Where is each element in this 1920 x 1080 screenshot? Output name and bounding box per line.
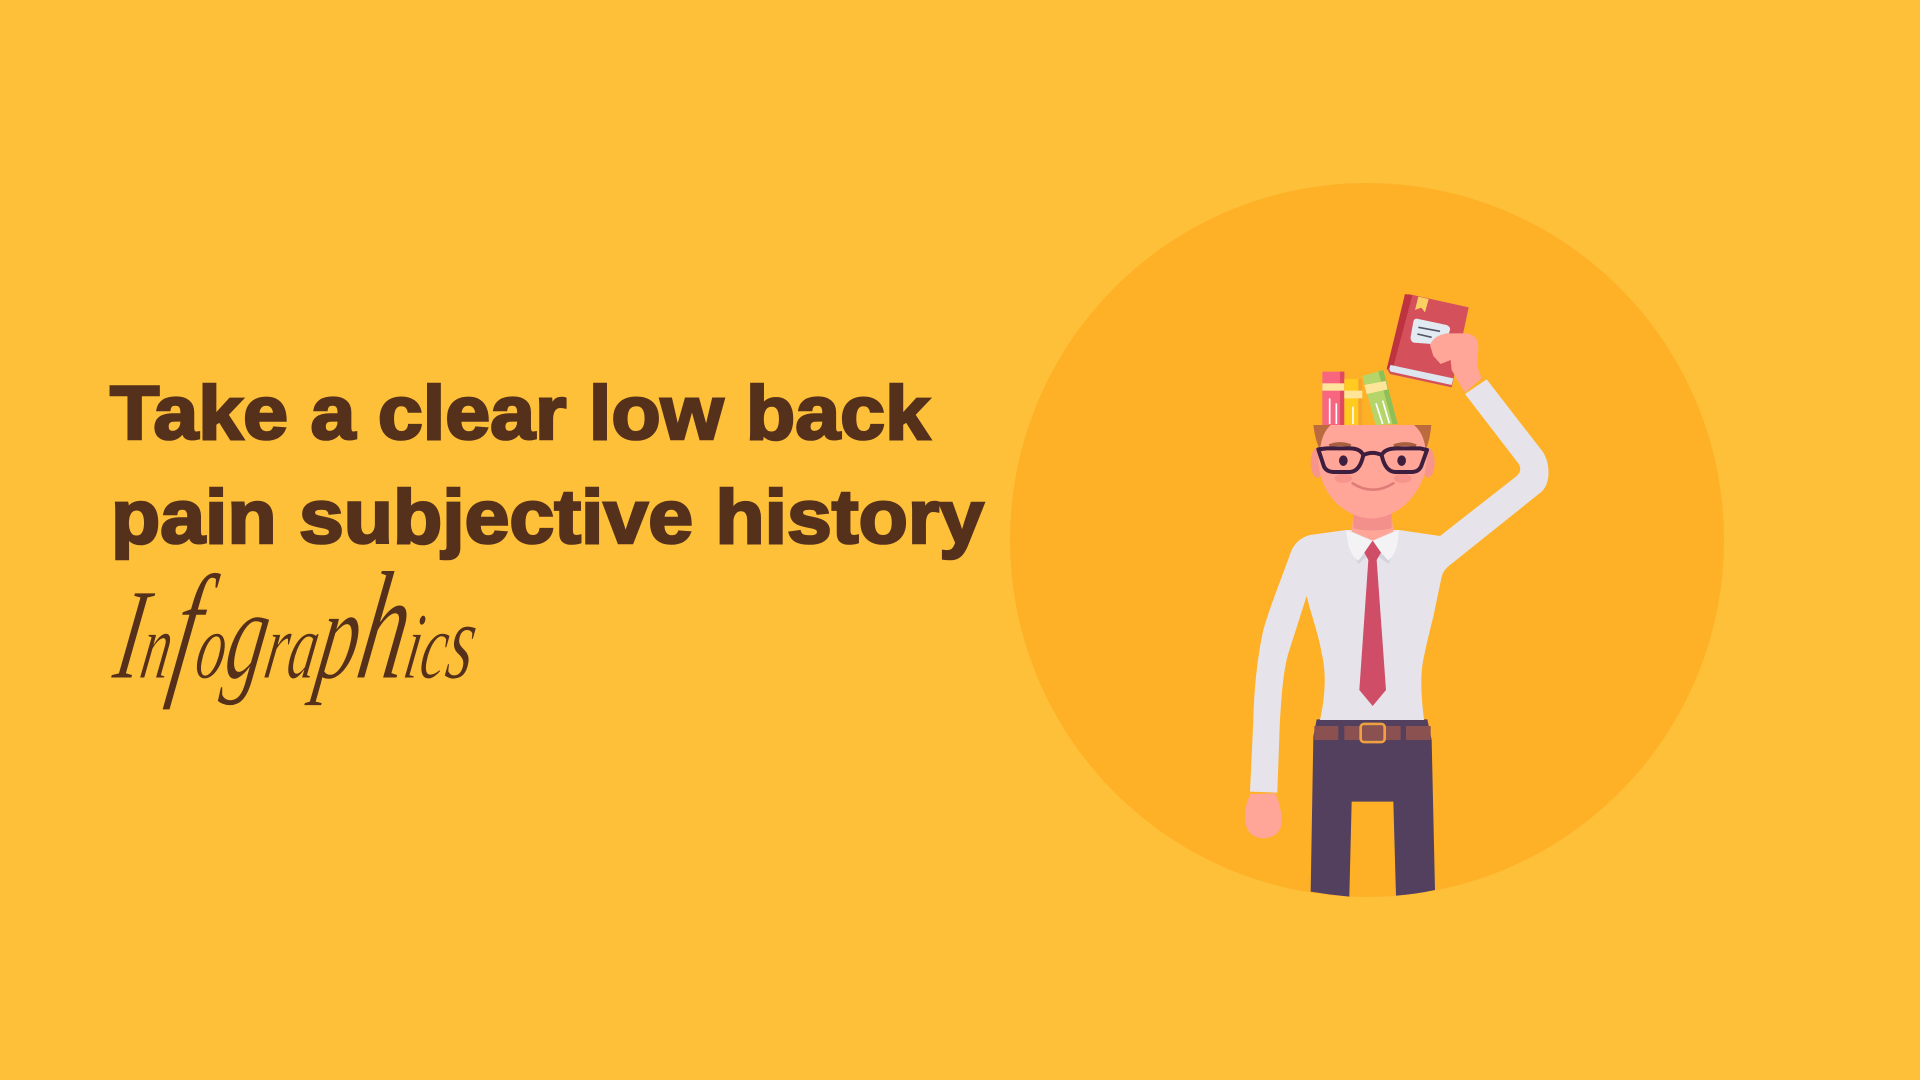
hair (1313, 425, 1431, 450)
neck (1352, 515, 1393, 541)
yellow book (1344, 379, 1362, 426)
trousers (1311, 719, 1435, 897)
book spine (1387, 294, 1412, 369)
belt buckle (1361, 724, 1385, 742)
ears (1311, 448, 1435, 478)
background circle (1010, 183, 1724, 897)
belt (1314, 726, 1431, 740)
shirt collar (1346, 530, 1399, 564)
cheeks (1335, 474, 1411, 483)
necktie (1359, 541, 1386, 706)
left fist (1245, 793, 1282, 838)
raised hand (1430, 333, 1482, 393)
upper body (1311, 294, 1482, 530)
bookmark (1415, 297, 1429, 312)
books in head (1322, 370, 1398, 426)
green book (1362, 370, 1398, 425)
illustration: man with books in head (1245, 294, 1549, 897)
glasses (1318, 448, 1427, 472)
book cover (1387, 294, 1469, 387)
face (1318, 425, 1427, 518)
book label (1411, 319, 1450, 345)
title: Take a clear low back (110, 371, 931, 456)
title: pain subjective history (111, 475, 984, 560)
neck shadow (1353, 513, 1392, 530)
smile (1353, 483, 1393, 490)
subtitle: Infographics script: Infographics (104, 541, 493, 712)
book pages (1389, 365, 1453, 385)
lower body (1245, 379, 1549, 897)
book with hand (1387, 294, 1482, 393)
eyes (1339, 455, 1406, 466)
shirt with arms (1250, 379, 1549, 793)
pink book (1322, 372, 1344, 426)
title (110, 371, 984, 560)
eyebrows (1329, 444, 1416, 446)
